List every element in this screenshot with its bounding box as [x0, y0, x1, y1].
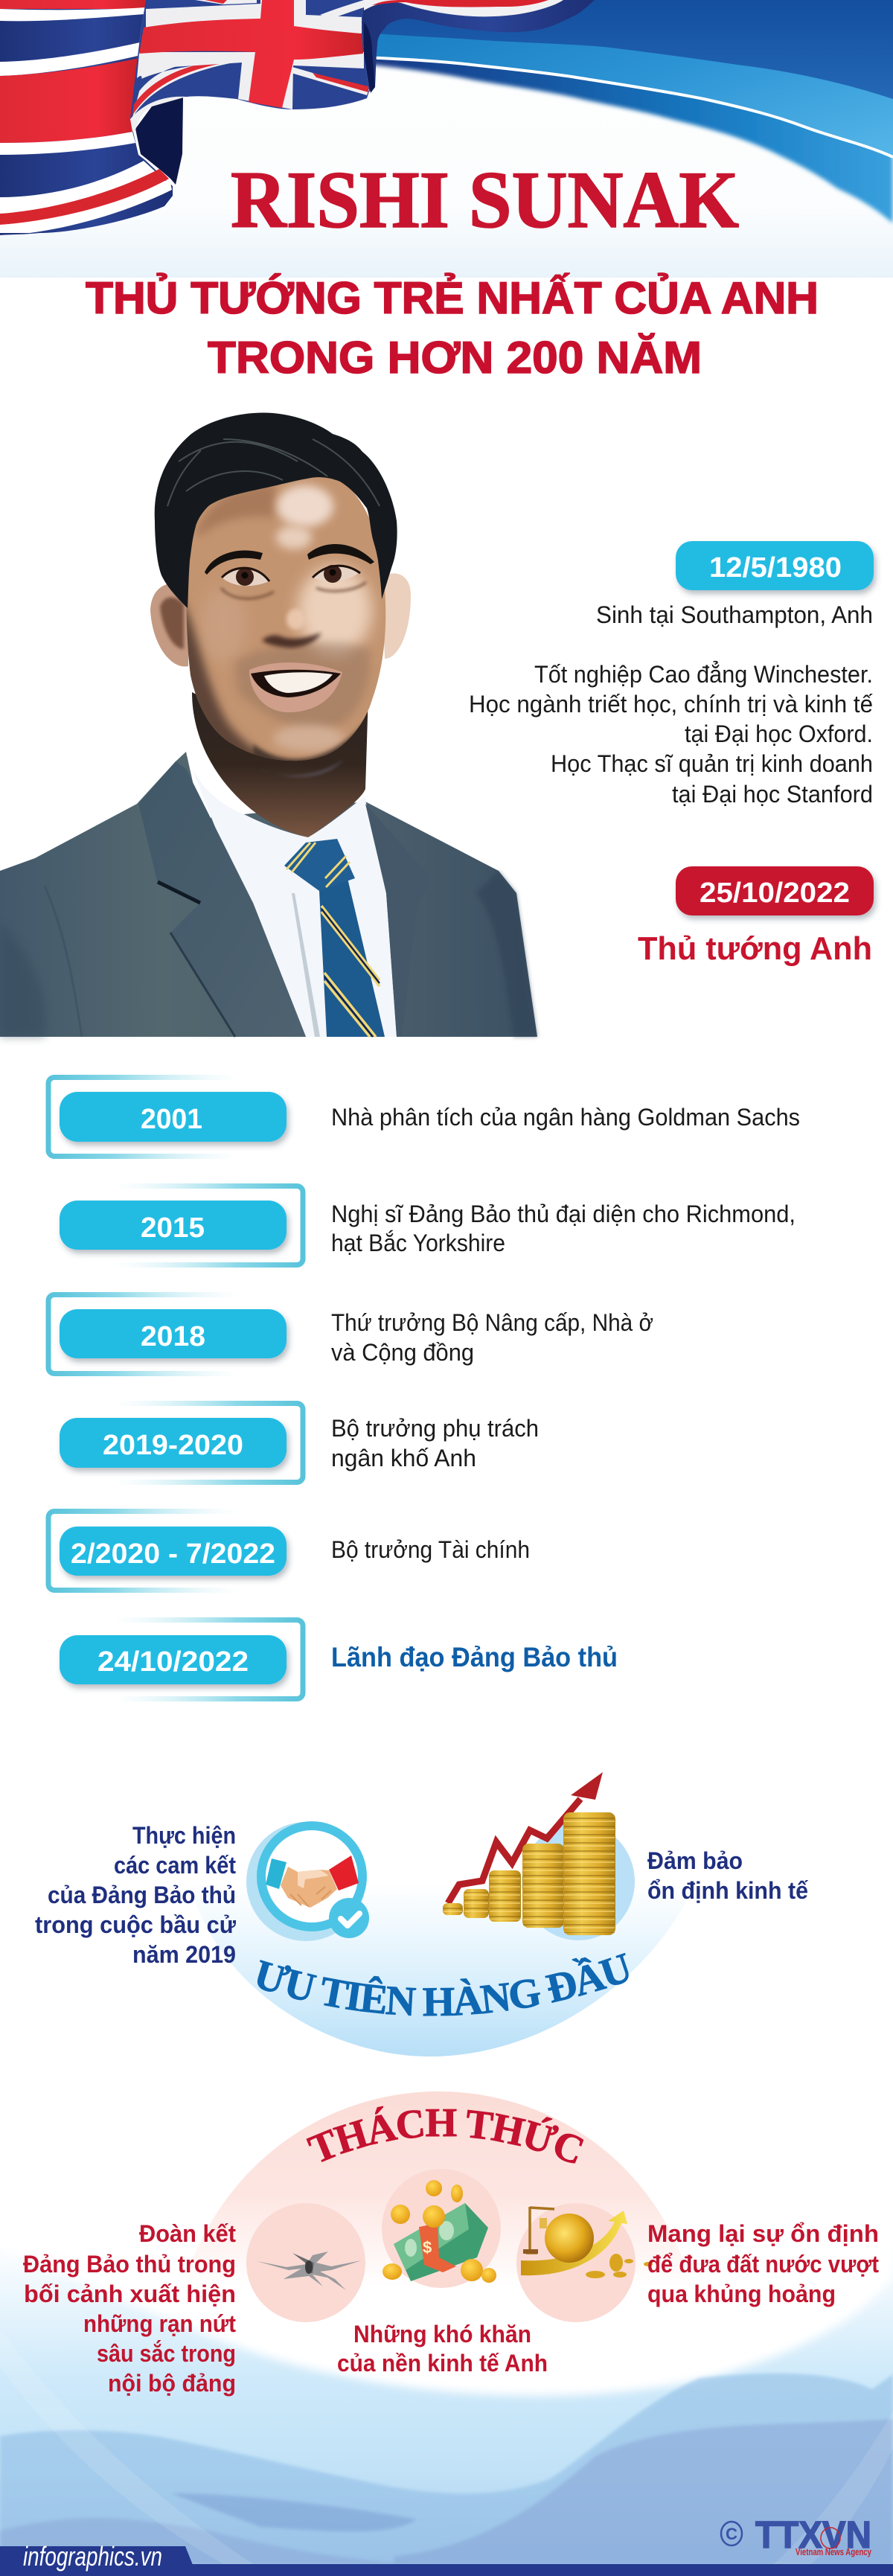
suit	[0, 752, 537, 1037]
icon: money and coins: $	[423, 2238, 432, 2257]
birth and education text: Học Thạc sĩ quản trị kinh doanh	[551, 750, 873, 777]
challenge 3 text: để đưa đất nước vượt	[647, 2251, 879, 2278]
priority 1 text	[35, 1822, 237, 1968]
timeline row 2015: hạt Bắc Yorkshire	[331, 1230, 505, 1256]
date pill: birth	[676, 541, 874, 590]
brows	[205, 550, 263, 575]
challenge 1 text: Đảng Bảo thủ trong	[23, 2251, 236, 2278]
timeline row 24/10/2022: 24/10/2022	[97, 1646, 249, 1678]
icon: money and coins	[382, 2169, 501, 2288]
icon: rising coins chart	[443, 1772, 635, 1940]
timeline row 2001	[48, 1078, 800, 1157]
right lapel	[365, 804, 432, 1037]
priority 2 text	[647, 1847, 808, 1904]
flag diagonals	[132, 54, 244, 118]
timeline row 2018: 2018	[141, 1321, 205, 1352]
flag dark fold	[135, 97, 183, 185]
timeline row 2/2020 - 7/2022: Bộ trưởng Tài chính	[331, 1536, 530, 1563]
timeline row 2019-2020: Bộ trưởng phụ trách	[331, 1415, 539, 1442]
flag cross	[146, 0, 362, 33]
challenge 1 text: Đoàn kết	[139, 2220, 236, 2247]
timeline row 2019-2020: ngân khố Anh	[331, 1445, 476, 1471]
source label: infographics.vn	[23, 2541, 162, 2572]
timeline row 2001: Nhà phân tích của ngân hàng Goldman Sachs	[331, 1104, 800, 1131]
face shading	[298, 566, 372, 655]
shirt	[186, 753, 397, 1037]
birth and education text: tại Đại học Oxford.	[685, 720, 873, 747]
left lapel	[138, 761, 306, 1037]
birth and education text: Sinh tại Southampton, Anh	[596, 601, 873, 628]
challenge 1 text: sâu sắc trong	[97, 2340, 236, 2367]
portrait of Rishi Sunak	[0, 412, 537, 1037]
prime minister label: Thủ tướng Anh	[638, 930, 872, 967]
subtitle: THỦ TƯỚNG TRẺ NHẤT CỦA ANH	[86, 273, 819, 323]
challenge 1 text: bối cảnh xuất hiện	[24, 2281, 236, 2307]
timeline row 2/2020 - 7/2022: 2/2020 - 7/2022	[71, 1538, 275, 1570]
timeline row 2001: 2001	[141, 1104, 202, 1135]
tie	[319, 878, 385, 1037]
hair	[155, 412, 397, 608]
birth and education text: Tốt nghiệp Cao đẳng Winchester.	[534, 661, 873, 688]
timeline row 24/10/2022: Lãnh đạo Đảng Bảo thủ	[331, 1642, 618, 1672]
challenge 3 text: qua khủng hoảng	[647, 2281, 836, 2307]
icon: crack	[246, 2203, 365, 2322]
face	[186, 477, 385, 761]
timeline row 2018	[48, 1295, 653, 1374]
icon: UK flag	[0, 0, 595, 235]
priority 1 text: các cam kết	[114, 1852, 236, 1879]
timeline row 2015: 2015	[141, 1212, 205, 1244]
challenge 2 text	[337, 2321, 548, 2377]
challenge 1 text: những rạn nứt	[83, 2310, 236, 2337]
panel: challenges	[23, 2091, 879, 2397]
flag centre panel	[130, 0, 369, 119]
priority 1 text: Thực hiện	[132, 1822, 236, 1849]
challenge 2 text: Những khó khăn	[353, 2321, 531, 2348]
birth and education text: Học ngành triết học, chính trị và kinh tế	[469, 691, 873, 717]
challenges heading: THÁCH THỨC	[307, 2106, 583, 2163]
priority 1 text: năm 2019	[132, 1941, 236, 1968]
challenge 3 text: Mang lại sự ổn định	[647, 2220, 879, 2247]
header background	[0, 0, 893, 278]
flag left stripes	[0, 0, 173, 235]
priority 1 text: trong cuộc bầu cử	[35, 1911, 237, 1938]
ears	[150, 584, 188, 667]
priority 2 text: Đảm bảo	[647, 1847, 743, 1874]
challenge 1 text	[23, 2220, 236, 2397]
date pill: prime minister	[676, 866, 874, 915]
icon: globe and growth arrow	[516, 2203, 653, 2322]
stubble	[234, 642, 370, 733]
birth and education text: tại Đại học Stanford	[672, 781, 873, 808]
panel: challenges background waves	[0, 2225, 893, 2576]
timeline	[48, 1078, 800, 1698]
timeline row 2015: Nghị sĩ Đảng Bảo thủ đại diện cho Richmond,	[331, 1201, 796, 1227]
mouth	[249, 662, 342, 712]
birth and education text	[469, 601, 873, 808]
nose	[262, 633, 321, 648]
challenge 3 text	[647, 2220, 879, 2307]
challenge 2 text: của nền kinh tế Anh	[337, 2350, 548, 2377]
icon: handshake	[246, 1822, 369, 1941]
priorities bowl background	[190, 1883, 696, 2056]
challenges dome	[179, 2091, 696, 2322]
eyes	[222, 569, 269, 586]
logo: TTXVN: C	[726, 2525, 737, 2543]
title: RISHI SUNAK	[231, 155, 739, 245]
flag right strip	[362, 0, 595, 92]
challenge 1 text: nội bộ đảng	[108, 2370, 236, 2397]
footer bar	[0, 2541, 893, 2576]
timeline row 2015	[60, 1186, 796, 1265]
timeline row 2018: Thứ trưởng Bộ Nâng cấp, Nhà ở	[331, 1309, 653, 1336]
priority 2 text: ổn định kinh tế	[647, 1877, 808, 1904]
priorities heading: ƯU TIÊN HÀNG ĐẦU	[257, 1953, 629, 2016]
timeline row 2019-2020: 2019-2020	[103, 1430, 243, 1461]
timeline row 2018: và Cộng đồng	[331, 1339, 474, 1366]
date pill: prime minister: 25/10/2022	[700, 878, 850, 909]
logo: TTXVN: TTXVN	[755, 2513, 871, 2556]
panel: top priorities	[35, 1772, 808, 2056]
timeline row 24/10/2022	[60, 1620, 618, 1698]
subtitle: TRONG HƠN 200 NĂM	[208, 333, 702, 383]
panel: biography	[469, 541, 874, 967]
date pill: birth: 12/5/1980	[709, 552, 842, 584]
timeline row 2019-2020	[60, 1404, 539, 1483]
neck	[192, 692, 368, 837]
priority 1 text: của Đảng Bảo thủ	[48, 1882, 236, 1908]
subtitle	[86, 273, 819, 383]
timeline row 2/2020 - 7/2022	[48, 1511, 530, 1590]
